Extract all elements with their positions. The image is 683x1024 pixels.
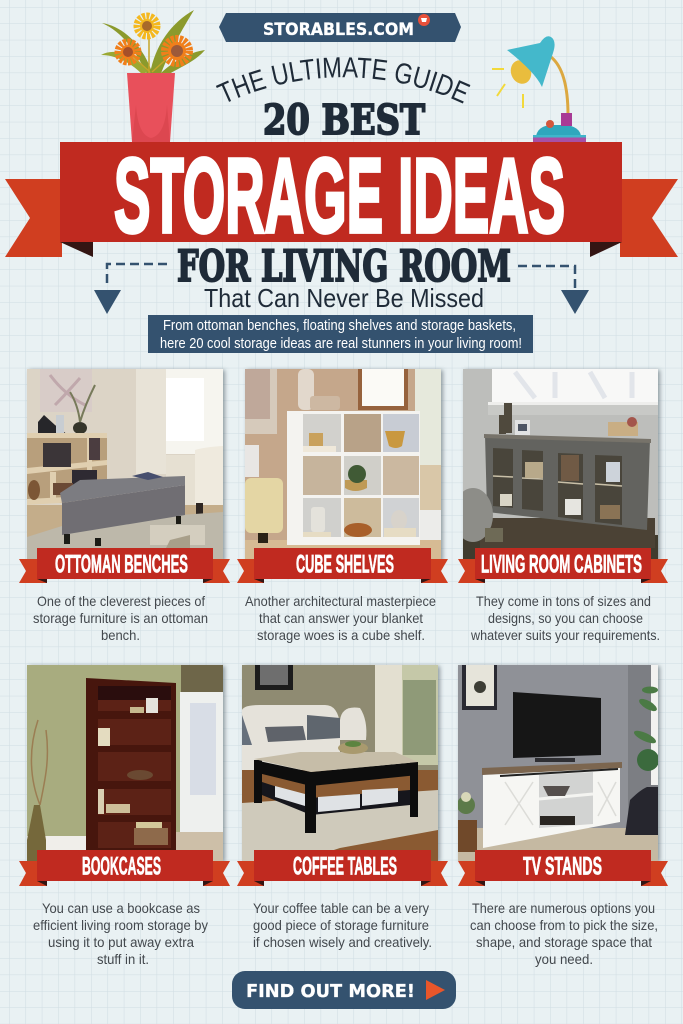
heading: the ultimate guide: THE ULTIMATE GUIDE [216,57,470,104]
panel: bookcases [19,665,230,967]
logo badge: storables.com [219,13,461,42]
description [470,593,660,643]
photo: cabinet [453,369,658,561]
table [254,752,418,833]
description: One of the cleverest pieces of [37,593,205,609]
subheading: That Can Never Be Missed [204,283,484,313]
ribbon: ottoman benches [19,548,230,583]
description: designs, so you can choose [488,610,643,626]
photo: coffee table [242,665,438,861]
intro text box: here 20 cool storage ideas are real stunners in your living room! [160,335,522,352]
description: You can use a bookcase as [42,900,200,916]
call to action button: FIND OUT MORE! [246,981,415,1002]
intro text box [148,315,533,353]
photo: cube shelf [245,369,441,561]
description: storage woes is a cube shelf. [257,627,425,643]
icon: cart [418,14,430,26]
panel: ottoman benches [19,369,230,643]
icon: desk lamp [492,36,586,142]
description [245,593,436,643]
description: if chosen wisely and creatively. [253,934,432,950]
description: Your coffee table can be a very [253,900,429,916]
ribbon: bookcases: BOOKCASES [82,852,161,880]
ribbon: living room cabinets [458,548,668,583]
description [33,593,208,643]
flower: orange right [165,39,189,63]
photo: ottoman bench [27,369,223,561]
description [470,900,658,967]
photo: bookcase [27,665,223,861]
ribbon: tv stands: TV STANDS [523,852,602,880]
photo: tv stand [457,665,659,861]
description [33,900,208,967]
arrow: dashed right [518,266,589,314]
flower: yellow [137,16,157,36]
description: whatever suits your requirements. [470,627,660,643]
description: stuff in it. [97,951,149,967]
ribbon: coffee tables: COFFEE TABLES [293,852,397,880]
panel: living room cabinets [453,369,668,643]
ribbon: bookcases [19,850,230,886]
description: Another architectural masterpiece [245,593,436,609]
panel: coffee tables [237,665,448,950]
description: efficient living room storage by [33,917,208,933]
logo badge: storables.com: STORABLES.COM [263,20,414,40]
description: There are numerous options you [472,900,655,916]
description: can choose from to pick the size, [470,917,658,933]
panel: tv stands [457,665,668,967]
ribbon: ottoman benches: OTTOMAN BENCHES [55,550,188,578]
panel: cube shelves [237,369,448,643]
heading: for living room: FOR LIVING ROOM [177,242,511,292]
heading: 20 best: 20 BEST [263,96,425,144]
description: you need. [535,951,593,967]
description: bench. [101,627,140,643]
description: that can answer your blanket [259,610,423,626]
description: using it to put away extra [48,934,194,950]
ribbon: cube shelves [237,548,448,583]
icon: play arrow [426,980,445,1000]
flower: orange left [118,42,138,62]
icon: flower vase [101,10,205,142]
call to action button [232,971,456,1009]
ribbon: cube shelves: CUBE SHELVES [296,550,394,578]
arrow: dashed left [94,264,167,314]
description [253,900,432,950]
ribbon: tv stands [458,850,668,886]
description: storage furniture is an ottoman [33,610,208,626]
ribbon: coffee tables [237,850,448,886]
main ribbon with title [5,137,678,257]
description: They come in tons of sizes and [476,593,651,609]
description: good piece of storage furniture [253,917,429,933]
description: shape, and storage space that [476,934,652,950]
intro text box: From ottoman benches, floating shelves and storage baskets, [163,317,516,334]
